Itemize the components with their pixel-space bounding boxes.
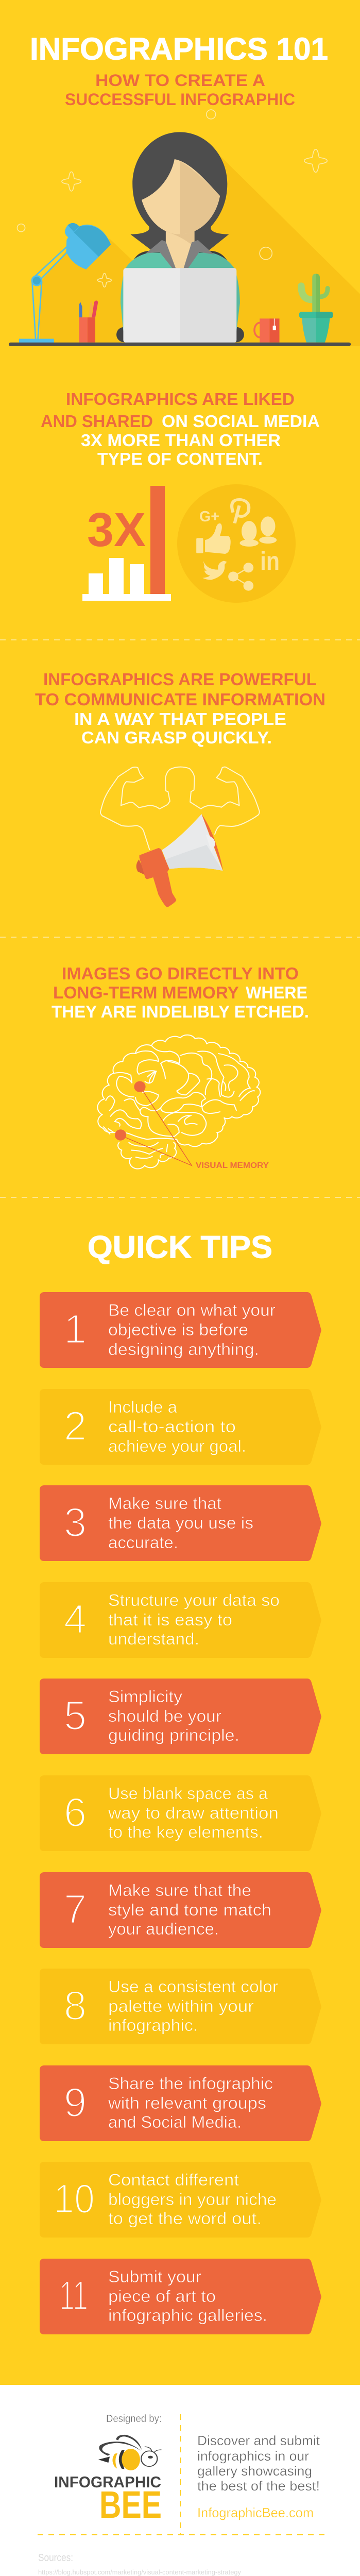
tip 7: style and tone match	[108, 1901, 271, 1919]
stat heading: liked and shared	[41, 390, 320, 469]
discover text	[197, 2433, 320, 2494]
tip 1	[40, 1292, 321, 1368]
tip 3: 3	[64, 1499, 87, 1545]
stat heading: liked and shared: TYPE OF CONTENT.	[97, 450, 263, 469]
tip 3: the data you use is	[108, 1514, 253, 1532]
tip 10: to get the word out.	[108, 2209, 262, 2228]
footer panel	[0, 2385, 360, 2576]
desk	[9, 343, 351, 346]
tip 11	[40, 2259, 321, 2334]
pencil cup	[79, 300, 98, 343]
tip 3: Make sure that	[108, 1494, 221, 1513]
tip 10: bloggers in your niche	[108, 2190, 277, 2209]
tip 4: understand.	[108, 1630, 199, 1648]
tip 4: Structure your data so	[108, 1591, 280, 1609]
tip 1: objective is before	[108, 1320, 248, 1339]
tip 4: that it is easy to	[108, 1611, 232, 1629]
discover text: Discover and submit	[197, 2433, 320, 2448]
tip 6	[40, 1775, 321, 1851]
tip 9: with relevant groups	[108, 2094, 266, 2112]
tip 7	[40, 1872, 321, 1948]
tip 6: to the key elements.	[108, 1823, 263, 1841]
icon: twitter	[202, 561, 227, 580]
red pointer lines	[115, 1081, 192, 1165]
subtitle: SUCCESSFUL INFOGRAPHIC	[65, 90, 295, 109]
tip 5: Simplicity	[108, 1687, 182, 1706]
tip 10: 10	[54, 2176, 95, 2222]
icon: share	[228, 563, 253, 591]
brain with visual memory markers	[97, 1035, 269, 1170]
stat heading: liked and shared: ON SOCIAL MEDIA	[162, 412, 320, 431]
tip 8	[40, 1969, 321, 2044]
icon: linkedin: in	[260, 547, 280, 575]
footer panel: BEE	[99, 2483, 162, 2526]
tip 11: piece of art to	[108, 2287, 216, 2306]
icon: google plus: G+	[199, 509, 219, 525]
tip 3	[40, 1485, 321, 1561]
tip 4	[40, 1582, 321, 1658]
title: INFOGRAPHICS 101	[30, 32, 328, 66]
tip 9: 9	[64, 2079, 87, 2125]
tip 2: achieve your goal.	[108, 1437, 246, 1455]
quick tips heading: QUICK TIPS	[88, 1229, 272, 1264]
discover text: gallery showcasing	[197, 2463, 312, 2479]
tip 5	[40, 1679, 321, 1754]
stat heading: powerful: IN A WAY THAT PEOPLE	[74, 710, 286, 729]
subtitle: HOW TO CREATE A	[95, 71, 265, 90]
tip 8: 8	[64, 1982, 87, 2028]
tip 5: guiding principle.	[108, 1726, 239, 1744]
desk lamp	[19, 223, 111, 343]
woman long shadow	[207, 156, 360, 346]
stat heading: powerful: CAN GRASP QUICKLY.	[81, 728, 272, 748]
bee logo icon	[98, 2435, 161, 2470]
cerebellum	[118, 1142, 176, 1169]
tip 1: 1	[64, 1306, 87, 1352]
tip 1: designing anything.	[108, 1340, 259, 1359]
tip 11: 11	[59, 2273, 88, 2318]
stat heading: long-term memory: IMAGES GO DIRECTLY INTO	[62, 964, 299, 984]
tip 7: your audience.	[108, 1920, 219, 1938]
logo wordmark: INFOGRAPHIC	[54, 2473, 161, 2491]
stat heading: liked and shared: 3X MORE THAN OTHER	[81, 431, 281, 450]
cactus	[299, 274, 333, 343]
tip 7: 7	[64, 1886, 87, 1932]
tip 8: Use a consistent color	[108, 1977, 278, 1996]
stat heading: powerful: TO COMMUNICATE INFORMATION	[35, 690, 325, 709]
icon: people	[239, 516, 277, 547]
discover text: the best of the best!	[197, 2478, 320, 2494]
tip 2	[40, 1389, 321, 1465]
stat heading: powerful	[35, 670, 325, 748]
tip 8: infographic.	[108, 2016, 198, 2035]
mug	[254, 318, 280, 343]
stat heading: liked and shared: INFOGRAPHICS ARE LIKED	[66, 390, 295, 409]
tip 4: 4	[64, 1596, 87, 1642]
stat heading: powerful: INFOGRAPHICS ARE POWERFUL	[43, 670, 317, 689]
tip 10: Contact different	[108, 2171, 239, 2189]
stat heading: long-term memory: THEY ARE INDELIBLY ETCHED.	[52, 1003, 309, 1022]
discover text: infographics in our	[197, 2448, 309, 2464]
social media circle	[177, 484, 296, 603]
sources: https://blog.hubspot.com/marketing/visual-content-marketing-strategy	[38, 2568, 241, 2576]
tip 5: 5	[64, 1692, 87, 1738]
tip 5: should be your	[108, 1707, 221, 1725]
stat heading: long-term memory: LONG-TERM MEMORY	[53, 984, 239, 1003]
stat heading: liked and shared: AND SHARED	[41, 412, 153, 431]
tip 6: 6	[64, 1789, 87, 1835]
tip 3: accurate.	[108, 1533, 178, 1552]
woman figure	[116, 132, 244, 342]
lamp long shadow	[40, 239, 134, 343]
tip 11: infographic galleries.	[108, 2306, 267, 2325]
bar chart: 3X: 3X	[87, 503, 146, 556]
icon: thumbs up	[196, 523, 231, 554]
tip 8: palette within your	[108, 1997, 254, 2015]
bar chart: 3X	[82, 486, 171, 601]
sources: Sources:	[38, 2552, 73, 2564]
subtitle	[65, 71, 295, 109]
megaphone	[136, 814, 223, 907]
tip 6: Use blank space as a	[108, 1784, 268, 1803]
tip 2: 2	[64, 1403, 87, 1449]
stat heading: long-term memory	[52, 964, 309, 1022]
website link text: InfographicBee.com	[197, 2505, 314, 2520]
brain folds	[104, 1128, 177, 1139]
tip 9: and Social Media.	[108, 2113, 242, 2131]
illustration: woman at desk	[9, 110, 360, 346]
tip 2: call-to-action to	[108, 1417, 236, 1436]
tip 9: Share the infographic	[108, 2074, 273, 2093]
icon: pinterest	[232, 500, 249, 523]
laptop	[123, 268, 236, 343]
strong man outline	[100, 767, 260, 850]
visual memory label: VISUAL MEMORY	[196, 1161, 269, 1170]
designed by label: Designed by:	[106, 2413, 162, 2425]
brain outline	[97, 1035, 260, 1146]
stat heading: long-term memory: WHERE	[246, 984, 307, 1003]
tip 10	[40, 2162, 321, 2238]
tip 7: Make sure that the	[108, 1881, 251, 1900]
tip 2: Include a	[108, 1398, 177, 1416]
tip 11: Submit your	[108, 2267, 201, 2286]
tip 1: Be clear on what your	[108, 1301, 276, 1319]
tip 6: way to draw attention	[108, 1804, 279, 1822]
sparkles and rings	[17, 110, 327, 287]
sources	[38, 2552, 321, 2576]
tip 9	[40, 2065, 321, 2141]
